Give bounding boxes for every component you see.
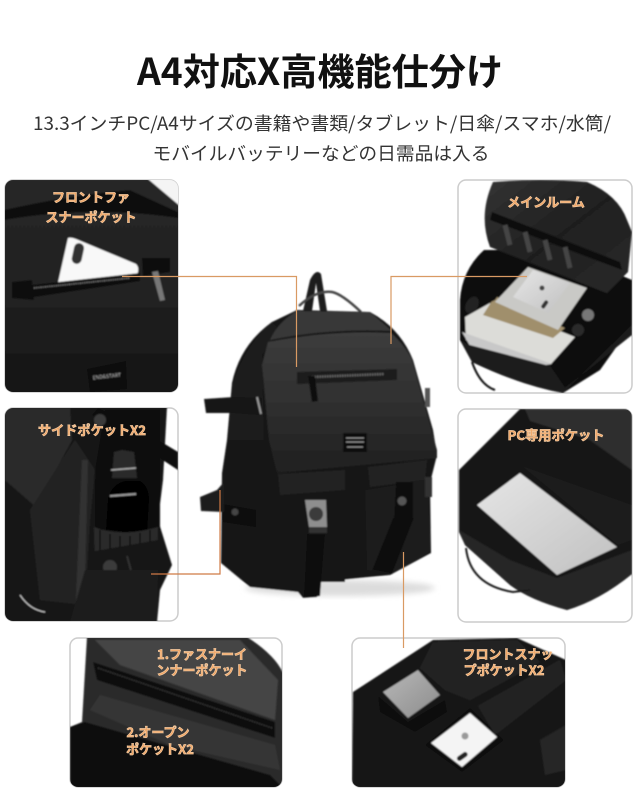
pocket strap (94, 540, 158, 558)
right edge clip (425, 477, 432, 497)
panel: main room (458, 180, 632, 393)
tablet (383, 670, 440, 718)
panel: front snap pockets (352, 638, 566, 788)
flap (420, 640, 540, 700)
lower pockets (278, 470, 345, 495)
pocket fabric (4, 179, 180, 394)
right side tab (425, 388, 430, 407)
pocket bottom (75, 570, 136, 620)
central backpack photo (200, 272, 437, 598)
arrow: side pocket to bag (151, 490, 220, 574)
umbrella (478, 294, 498, 308)
lower pocket sheen (90, 695, 280, 770)
bag front (352, 638, 566, 788)
label 2: 2.オープン (126, 722, 190, 741)
floor shadow (245, 580, 435, 596)
open lid (485, 180, 632, 293)
right snap (398, 496, 406, 506)
front zipper (297, 369, 397, 384)
phone (57, 238, 138, 287)
zipper pull (152, 271, 165, 301)
phone on books (514, 270, 565, 306)
label: メインルーム (507, 192, 585, 211)
bag body (460, 250, 632, 393)
laptop (477, 473, 617, 575)
zipper pull (308, 376, 318, 402)
lining top (525, 409, 632, 470)
label 1: ンナーポケット (156, 660, 248, 679)
rim (459, 530, 632, 610)
bottle body (106, 481, 149, 535)
top band (270, 311, 392, 340)
zipper band (93, 662, 275, 738)
book stack (483, 296, 565, 338)
left side strap tab (204, 397, 262, 415)
lower-left white strap (20, 595, 45, 612)
label: スナーポケット (45, 207, 137, 226)
panel: side pocket (4, 407, 178, 622)
bag interior (459, 409, 632, 610)
gathered pocket (94, 526, 159, 551)
arrow: front fastener pocket to bag (122, 276, 296, 367)
logo patch: END&START (92, 372, 121, 381)
subtitle line 2: モバイルバッテリーなどの日需品は入る (152, 140, 490, 166)
logo patch (87, 361, 127, 392)
label 1: 1.ファスナーイ (157, 644, 247, 663)
zipper (32, 273, 140, 297)
lower black (70, 722, 283, 788)
title: A4対応X高機能仕分け (136, 42, 503, 96)
flap right (478, 660, 566, 735)
lining folds (505, 225, 570, 268)
zipper end tab (142, 258, 170, 276)
label 1 (156, 644, 248, 679)
phone camera (71, 242, 85, 265)
white floor of bag (465, 303, 575, 364)
label: フロントスナッ (462, 644, 554, 663)
side strap tab (200, 482, 224, 512)
lower rim (460, 325, 632, 393)
handle (466, 548, 530, 592)
phone pocket (425, 708, 504, 772)
bottle pocket void (95, 410, 160, 530)
panel: front fastener pocket (4, 179, 180, 394)
flap logo patch (343, 433, 367, 452)
snap at top (94, 414, 106, 426)
label 2 (126, 722, 194, 758)
front flap (262, 332, 437, 473)
bag side (4, 407, 172, 622)
subtitle line 1: 13.3インチPC/A4サイズの書籍や書類/タブレット/日傘/スマホ/水筒/ (33, 110, 611, 136)
left shoulder padding (228, 322, 280, 440)
side pocket buckle (222, 504, 256, 527)
label 2: ポケットX2 (126, 739, 194, 758)
right wrinkles (540, 725, 566, 775)
pocket straps (304, 534, 325, 597)
label: サイドポケットX2 (38, 420, 146, 439)
label: PC専用ポケット (508, 425, 604, 444)
label (45, 187, 137, 226)
panel: PC pocket (458, 409, 632, 622)
arrow: snap pocket to bag (402, 552, 404, 648)
handle loop (472, 362, 495, 390)
top band seam (4, 190, 178, 220)
lid zipper (490, 212, 622, 270)
bottle neck (112, 450, 137, 478)
pocket sleeve (522, 466, 632, 545)
shoulder strap crossing (92, 408, 178, 470)
upper pocket (378, 696, 447, 732)
left silver buckle (305, 500, 327, 533)
back body silhouette (221, 310, 437, 598)
arrow: main room to bag (391, 276, 527, 344)
label: プポケットX2 (464, 660, 544, 679)
corner background (148, 179, 180, 206)
carry handle (299, 292, 361, 312)
top loop strap (303, 272, 327, 311)
label: フロントファ (52, 187, 130, 206)
phone (431, 713, 497, 767)
label (462, 644, 554, 679)
panel: inner pockets (70, 637, 283, 788)
side highlights (5, 408, 72, 507)
bottle at right (582, 309, 594, 321)
snap button (102, 560, 118, 570)
lid lining (70, 637, 283, 788)
